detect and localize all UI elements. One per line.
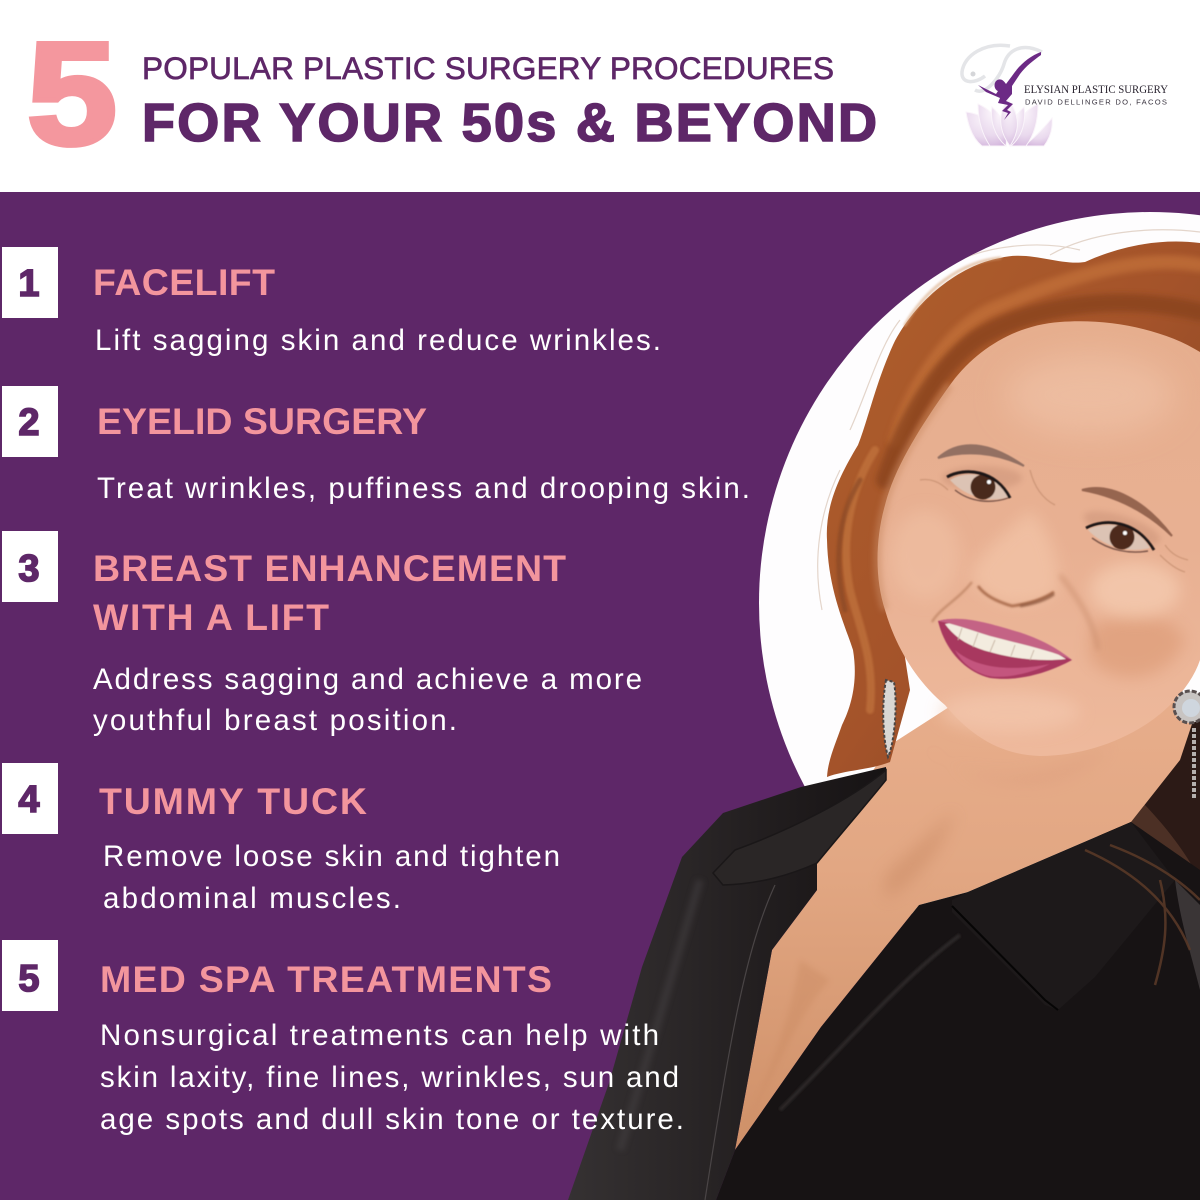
portrait of smiling woman: [568, 230, 1200, 1200]
face edge shadow: [878, 385, 950, 610]
logo: [962, 45, 1169, 146]
neck and chest skin: [735, 680, 1200, 1150]
nose: [932, 510, 1098, 650]
item 5: med spa treatments: [2, 940, 684, 1136]
portrait backdrop circle: [759, 212, 1200, 994]
description 4: Remove loose skin and tighten: [103, 840, 560, 873]
number badge 5: 5: [18, 958, 40, 1000]
number badge 2: 2: [18, 402, 40, 444]
number badge 2: [2, 386, 58, 457]
right collar: [967, 822, 1131, 892]
hair highlights: [839, 258, 1200, 710]
left collar: [713, 770, 886, 885]
shirt body: [716, 822, 1200, 1200]
smiling mouth: [938, 619, 1072, 679]
item 2: eyelid surgery: [2, 386, 750, 505]
number badge 4: [2, 763, 58, 834]
cheek warmth and forehead light: [1090, 614, 1185, 677]
face: [878, 321, 1200, 756]
title line 2: FOR YOUR 50s & BEYOND: [142, 93, 877, 153]
heading 4: TUMMY TUCK: [99, 780, 367, 822]
heading 2: EYELID SURGERY: [97, 400, 427, 442]
hair wisps on white: [818, 230, 1200, 610]
hair strands over collar: [1085, 845, 1200, 985]
collar edge: [952, 906, 1058, 1010]
number badge 3: 3: [18, 548, 40, 590]
auburn hair: [827, 242, 1200, 777]
header band: [0, 0, 1200, 192]
heading 1: FACELIFT: [93, 261, 275, 303]
number badge 4: 4: [18, 779, 40, 821]
heading 5: MED SPA TREATMENTS: [100, 958, 552, 1000]
description 4: [103, 840, 560, 915]
description 3: youthful breast position.: [93, 704, 457, 737]
right eyebrow: [1082, 488, 1172, 536]
logo swirl: [962, 45, 1042, 91]
neck shading: [745, 745, 1110, 1130]
eye socket shading: [944, 466, 1159, 544]
description 5: [100, 1019, 684, 1136]
heading 3: WITH A LIFT: [93, 596, 329, 638]
description 4: abdominal muscles.: [103, 882, 401, 915]
description 3: Address sagging and achieve a more: [93, 663, 642, 696]
logo dancer figure: [978, 52, 1041, 120]
description 5: age spots and dull skin tone or texture.: [100, 1103, 684, 1136]
description 5: skin laxity, fine lines, wrinkles, sun and: [100, 1061, 679, 1094]
heading 3: [93, 547, 566, 638]
item 3: breast enhancement: [2, 531, 642, 737]
number badge 3: [2, 531, 58, 602]
left eye: [947, 472, 1010, 501]
description 3: [93, 663, 642, 737]
right earring: [1174, 691, 1200, 800]
left eyebrow: [938, 445, 1024, 466]
number badge 5: [2, 940, 58, 1011]
black shirt: [568, 767, 1200, 1200]
dark back hair: [1098, 721, 1200, 870]
right shoulder highlight: [1175, 880, 1200, 990]
number badge 1: 1: [18, 263, 40, 305]
description 2: Treat wrinkles, puffiness and drooping skin.: [97, 472, 750, 505]
title: [142, 50, 877, 153]
number badge 1: [2, 247, 58, 318]
logo doctor line: DAVID DELLINGER DO, FACOS: [1025, 98, 1167, 106]
eye wrinkles and shadow: [920, 470, 1188, 572]
title line 1: POPULAR PLASTIC SURGERY PROCEDURES: [142, 50, 834, 86]
description 5: Nonsurgical treatments can help with: [100, 1019, 659, 1052]
placket lines: [780, 935, 960, 1110]
left sleeve and shoulder: [568, 767, 886, 1200]
left earring: [883, 680, 896, 757]
item 4: tummy tuck: [2, 763, 560, 915]
item 1: facelift: [2, 247, 661, 357]
big number 5: 5: [27, 12, 117, 175]
lotus flower: [966, 100, 1052, 146]
right eye: [1086, 523, 1154, 552]
heading 3: BREAST ENHANCEMENT: [93, 547, 566, 589]
logo name: ELYSIAN PLASTIC SURGERY: [1024, 84, 1169, 96]
description 1: Lift sagging skin and reduce wrinkles.: [95, 324, 661, 357]
